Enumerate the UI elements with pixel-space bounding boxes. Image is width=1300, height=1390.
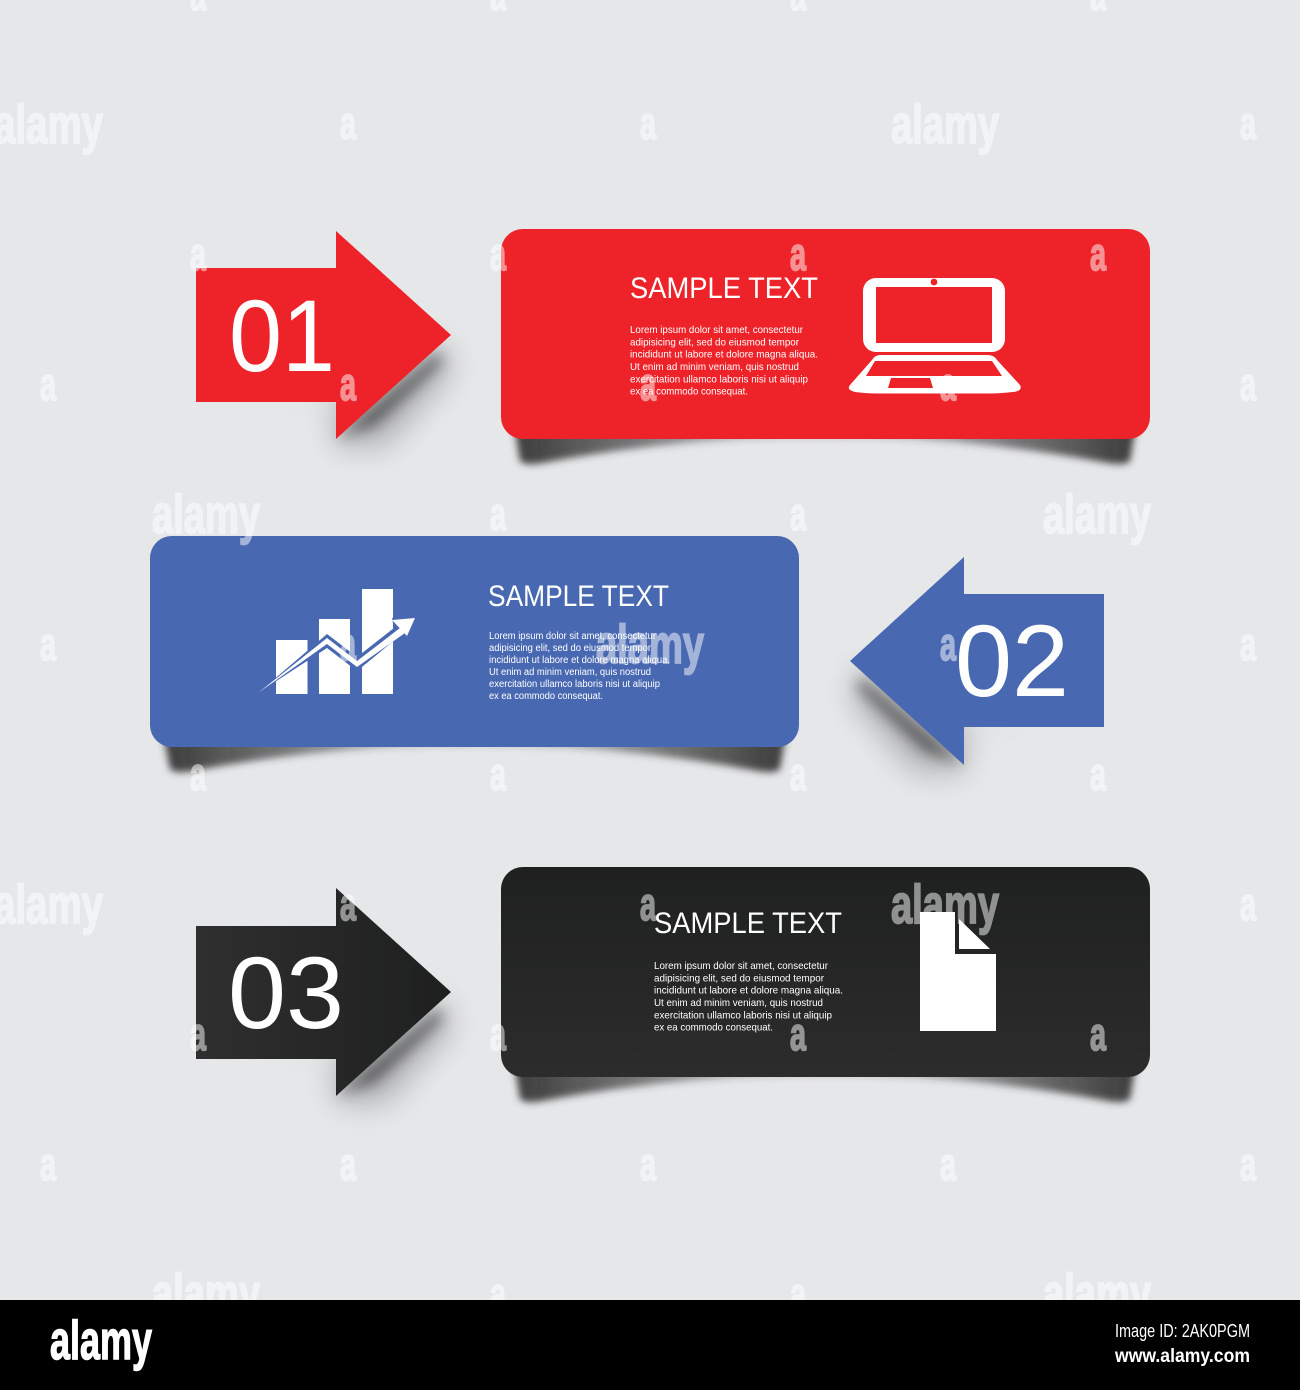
footer logo: alamy (50, 1309, 152, 1371)
panel: red card: incididunt ut labore et dolore magna aliqua. (630, 350, 818, 361)
watermarks: alamy (891, 93, 999, 155)
watermarks: a (640, 358, 656, 410)
watermarks: a (1240, 97, 1256, 149)
panel: red card: adipisicing elit, sed do eiusmod tempor (630, 337, 800, 348)
panel: blue card: ex ea commodo consequat. (489, 691, 603, 702)
watermarks: a (1240, 878, 1256, 930)
watermarks: a (790, 748, 806, 800)
panel: blue card: Ut enim ad minim veniam, quis nostrud (489, 667, 651, 678)
watermarks: a (790, 1008, 806, 1060)
watermarks: a (1090, 748, 1106, 800)
watermarks: alamy (1043, 1262, 1151, 1324)
panel: black card: SAMPLE TEXT (654, 907, 842, 940)
website: www.alamy.com (1114, 1346, 1250, 1367)
watermarks: a (940, 1138, 956, 1190)
watermarks: a (340, 97, 356, 149)
watermarks: a (340, 618, 356, 670)
watermarks: a (490, 488, 506, 540)
arrow 01 (196, 231, 452, 446)
panel: red card: Ut enim ad minim veniam, quis nostrud (630, 362, 799, 373)
watermarks: a (40, 358, 56, 410)
watermarks: a (340, 878, 356, 930)
watermarks: a (940, 358, 956, 410)
footer bar (0, 1300, 1300, 1390)
panel: blue card (150, 536, 799, 772)
watermarks: alamy (152, 1262, 260, 1324)
icon: bar chart with rising arrow (258, 589, 418, 694)
panel: black card: ex ea commodo consequat. (654, 1023, 773, 1034)
panel: red card: Lorem ipsum dolor sit amet, consectetur (630, 325, 804, 336)
watermarks: a (790, 488, 806, 540)
watermarks: a (490, 1008, 506, 1060)
watermarks: a (490, 1268, 506, 1320)
watermarks: a (640, 1138, 656, 1190)
watermarks: a (190, 748, 206, 800)
watermarks: a (640, 97, 656, 149)
panel: black card (501, 867, 1150, 1102)
panel: black card: Lorem ipsum dolor sit amet, consectetur (654, 961, 829, 972)
watermarks: a (640, 878, 656, 930)
arrow 02: 02 (955, 604, 1069, 718)
watermarks: a (490, 748, 506, 800)
image id: Image ID: 2AK0PGM (1115, 1321, 1250, 1341)
panel: blue card: adipisicing elit, sed do eiusmod tempor (489, 643, 652, 654)
watermarks: a (940, 618, 956, 670)
watermarks: a (490, 228, 506, 280)
watermarks: a (190, 228, 206, 280)
panel: black card: adipisicing elit, sed do eiusmod tempor (654, 973, 825, 984)
watermarks: a (790, 1268, 806, 1320)
icon: laptop (849, 278, 1021, 394)
panel: blue card: exercitation ullamco laboris nisi ut aliquip (489, 679, 660, 690)
watermarks: a (340, 1138, 356, 1190)
panel: red card: ex ea commodo consequat. (630, 387, 748, 398)
arrow 02 (850, 557, 1104, 772)
panel: red card: SAMPLE TEXT (630, 272, 818, 305)
panel: black card: exercitation ullamco laboris nisi ut aliquip (654, 1010, 832, 1021)
icon: document (920, 912, 996, 1031)
watermarks: a (1240, 1138, 1256, 1190)
watermarks: a (190, 1008, 206, 1060)
panel: red card (501, 229, 1150, 464)
watermarks: a (1240, 618, 1256, 670)
panel: black card: incididunt ut labore et dolore magna aliqua. (654, 986, 843, 997)
panel: blue card: incididunt ut labore et dolore magna aliqua. (489, 655, 670, 666)
watermarks: alamy (152, 483, 260, 545)
panel: blue card: SAMPLE TEXT (488, 580, 669, 613)
arrow 03 (196, 888, 452, 1103)
watermarks: alamy (891, 873, 999, 935)
panel: black card: Ut enim ad minim veniam, quis nostrud (654, 998, 823, 1009)
watermarks: a (40, 618, 56, 670)
panel: red card: exercitation ullamco laboris nisi ut aliquip (630, 374, 808, 385)
watermarks: a (1090, 1008, 1106, 1060)
arrow 01: 01 (229, 279, 335, 393)
watermarks: alamy (596, 613, 704, 675)
watermarks: a (340, 358, 356, 410)
watermarks: alamy (1043, 483, 1151, 545)
watermarks: a (40, 1138, 56, 1190)
watermarks: a (1090, 228, 1106, 280)
watermarks: a (1240, 358, 1256, 410)
watermarks: a (790, 228, 806, 280)
panel: blue card: Lorem ipsum dolor sit amet, consectetur (489, 631, 657, 642)
arrow 03: 03 (228, 936, 344, 1050)
